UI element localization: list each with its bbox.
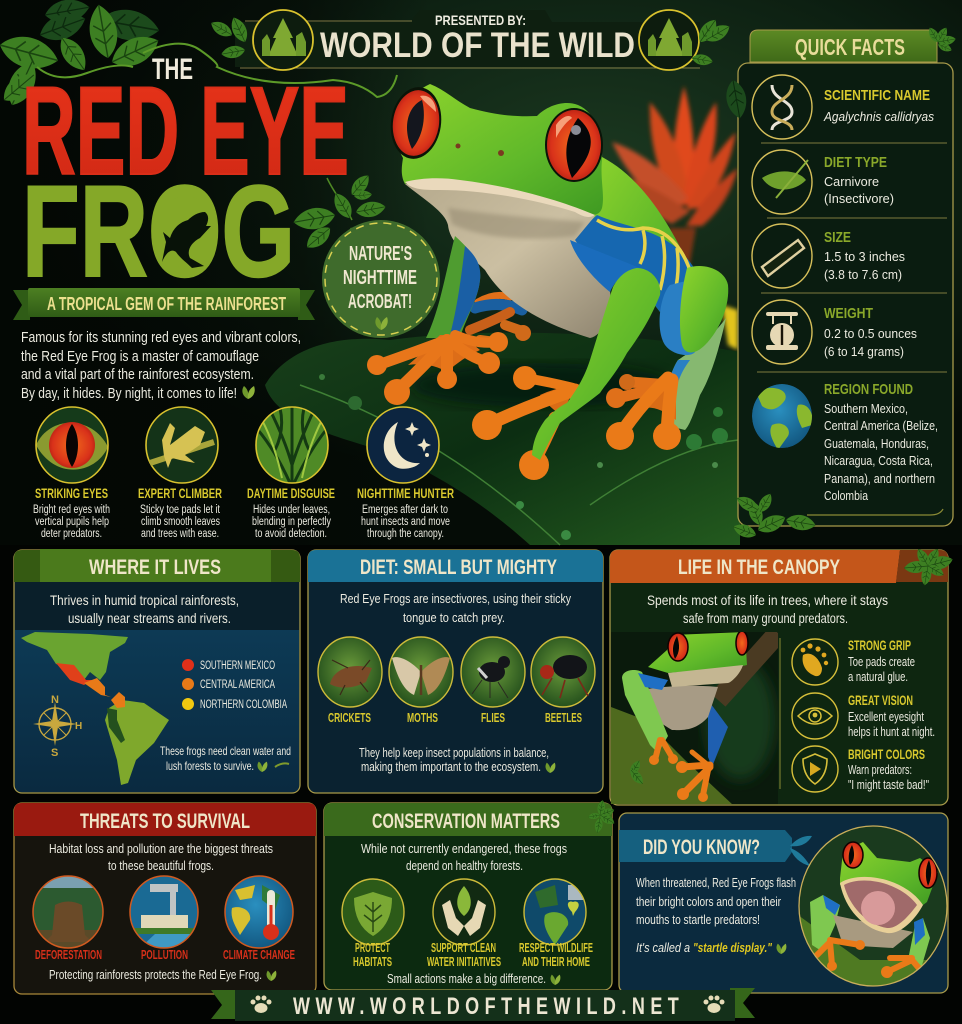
panel: did you know (619, 813, 948, 993)
insect: beetles: BEETLES (545, 711, 582, 725)
panel: conservation matters: depend on healthy forests. (406, 859, 523, 873)
icon: compass: H (75, 721, 82, 732)
fact: diet type: (Insectivore) (824, 191, 894, 206)
did you know heading: DID YOU KNOW? (643, 836, 760, 859)
intro paragraph (21, 329, 301, 402)
trait: bright colors (792, 746, 929, 792)
feature: expert climber: climb smooth leaves (141, 516, 220, 528)
fact: size: SIZE (824, 229, 851, 246)
title (22, 53, 349, 304)
action: protect habitats: PROTECT (355, 941, 390, 955)
panel: threats to survival: to these beautiful frogs. (108, 859, 214, 873)
feature: expert climber: EXPERT CLIMBER (138, 485, 222, 501)
trait: great vision: Excellent eyesight (848, 710, 924, 724)
fact: region found: Southern Mexico, (824, 401, 908, 416)
header banner: presented by (235, 10, 700, 68)
feature: daytime disguise: to avoid detection. (255, 528, 327, 540)
fact: scientific name: Agalychnis callidryas (823, 109, 934, 124)
insect: flies: FLIES (481, 711, 505, 725)
trait: strong grip: Toe pads create (848, 655, 915, 669)
right eye (545, 108, 603, 182)
rear far toes (470, 295, 670, 398)
action: support clean water: WATER INITIATIVES (427, 955, 501, 969)
flower: yellow bloom at right (722, 305, 738, 350)
logo right: forest emblem (639, 10, 733, 70)
threat: pollution: POLLUTION (141, 947, 188, 962)
action: respect wildlife: RESPECT WILDLIFE (519, 941, 593, 955)
threat: pollution (130, 876, 198, 962)
badge: nature's nighttime acrobat: ACROBAT! (348, 291, 412, 313)
left arm (426, 236, 480, 338)
rear foot (642, 375, 676, 420)
map legend: NORTHERN COLOMBIA (200, 699, 287, 711)
ribbon: tagline (13, 288, 315, 320)
title: THE (152, 53, 193, 86)
panel: where it lives: lush forests to survive. (166, 759, 254, 773)
fact: diet type: Carnivore (824, 174, 879, 189)
fact: weight (752, 300, 917, 364)
intro paragraph: Famous for its stunning red eyes and vibrant colors, (21, 329, 301, 346)
feature: striking eyes (33, 407, 110, 540)
panel: quick facts (738, 30, 953, 526)
where it lives heading: WHERE IT LIVES (89, 556, 221, 579)
panel: did you know: mouths to startle predators! (636, 912, 760, 927)
icon: climbing frog (146, 407, 218, 483)
map legend: SOUTHERN MEXICO (200, 660, 275, 672)
insect: moths (389, 637, 453, 725)
icon: ruler (752, 224, 812, 288)
panel: life in the canopy: safe from many ground predators. (683, 610, 848, 626)
panel: conservation matters: While not currently endangered, these frogs (361, 842, 567, 856)
fact: weight: WEIGHT (824, 305, 873, 322)
panel: conservation matters (324, 803, 612, 990)
panel: life in the canopy: Spends most of its life in trees, where it stays (647, 592, 888, 608)
startled frog photo (798, 826, 948, 986)
feature: striking eyes: deter predators. (41, 528, 102, 540)
icon: red eye (36, 407, 108, 483)
brand name: WORLD OF THE WILD (320, 26, 635, 65)
main frog leaf (265, 333, 740, 545)
trait: bright colors: Warn predators: (848, 763, 912, 777)
front foot (540, 385, 575, 416)
panel: diet: making them important to the ecosystem. (361, 760, 541, 774)
action: protect habitats: HABITATS (353, 955, 392, 969)
fact: scientific name (752, 75, 934, 139)
website url: WWW.WORLDOFTHEWILD.NET (293, 994, 684, 1020)
fact: diet type: DIET TYPE (824, 154, 887, 171)
leaves: canopy corner (904, 547, 954, 586)
icon: scale (752, 300, 812, 364)
left eye (386, 84, 446, 162)
belly (405, 178, 610, 338)
solid O fill behind silhouette (156, 196, 216, 268)
feature: expert climber (138, 407, 222, 540)
footer ribbon: website (211, 988, 755, 1021)
icon: compass: N (51, 694, 59, 706)
panel: did you know: It's called a (636, 940, 690, 955)
fact: diet type (752, 150, 894, 214)
conservation heading: CONSERVATION MATTERS (372, 810, 560, 833)
fact: region found: REGION FOUND (824, 381, 913, 398)
map legend: CENTRAL AMERICA (200, 679, 275, 691)
fact: region found: Colombia (824, 488, 869, 503)
feature: nighttime hunter: hunt insects and move (361, 516, 450, 528)
logo left: forest emblem (208, 10, 313, 70)
leaves: top left cluster (0, 0, 164, 110)
feature: nighttime hunter: Emerges after dark to (362, 504, 448, 516)
panel: did you know: When threatened, Red Eye Frogs flash (636, 875, 796, 890)
panel: where it lives: These frogs need clean water and (160, 744, 291, 758)
panel: diet: Red Eye Frogs are insectivores, using their sticky (340, 591, 571, 606)
fact: region found: Nicaragua, Costa Rica, (824, 453, 933, 468)
panel: rainforest hero background (0, 0, 962, 545)
panel: did you know: "startle display." (693, 940, 773, 955)
action: support clean water: SUPPORT CLEAN (431, 941, 496, 955)
fact: region found: Panama), and northern (824, 471, 935, 486)
icon: moon and stars (367, 407, 439, 483)
feature: daytime disguise: Hides under leaves, (253, 504, 330, 516)
trait: great vision: helps it hunt at night. (848, 725, 935, 739)
insect: flies (461, 637, 525, 725)
feature: nighttime hunter: NIGHTTIME HUNTER (357, 485, 454, 501)
title: RED EYE (22, 62, 349, 201)
threat: climate change (223, 876, 295, 962)
action: protect habitats (342, 879, 404, 969)
icon: paw left (250, 996, 272, 1013)
panel: threats to survival: Habitat loss and pollution are the biggest threats (49, 842, 273, 856)
map of the Americas (21, 632, 169, 785)
insect: crickets: CRICKETS (328, 711, 371, 725)
action: support clean water (427, 879, 501, 969)
icon: globe (752, 384, 813, 450)
fact: region found (752, 381, 938, 503)
fact: size: 1.5 to 3 inches (824, 249, 905, 264)
presented by text: PRESENTED BY: (435, 12, 526, 28)
feature: striking eyes: STRIKING EYES (35, 485, 108, 501)
icon: paw right (704, 996, 724, 1013)
insect: beetles (531, 637, 595, 725)
icon: leaf camouflage (256, 407, 328, 483)
quick facts heading: QUICK FACTS (795, 34, 905, 60)
feature: nighttime hunter (357, 407, 454, 540)
feature: striking eyes: vertical pupils help (35, 516, 109, 528)
trait: great vision (792, 692, 935, 739)
icon: compass (33, 694, 82, 759)
threat: climate change: CLIMATE CHANGE (223, 947, 295, 962)
panel: where it lives: Thrives in humid tropical rainforests, (50, 592, 239, 608)
action: respect wildlife (519, 879, 593, 969)
trait: strong grip: a natural glue. (848, 670, 908, 684)
feature: daytime disguise (247, 407, 335, 540)
fact: region found: Central America (Belize, (824, 418, 938, 433)
fact: weight: (6 to 14 grams) (824, 344, 904, 359)
insect: crickets (318, 637, 382, 725)
leaves: quick facts corners (723, 26, 957, 541)
threat: deforestation: DEFORESTATION (35, 947, 102, 962)
map legend (182, 659, 287, 711)
action: respect wildlife: AND THEIR HOME (522, 955, 590, 969)
vines (37, 44, 397, 97)
panel: where it lives: usually near streams and rivers. (68, 610, 231, 626)
feature: striking eyes: Bright red eyes with (33, 504, 110, 516)
ribbon: tagline: A TROPICAL GEM OF THE RAINFOREST (47, 294, 286, 314)
icon: DNA helix (752, 75, 812, 139)
fact: region found: Guatemala, Honduras, (824, 436, 929, 451)
fact: scientific name: SCIENTIFIC NAME (824, 87, 930, 104)
flower: red bromeliad (606, 86, 738, 285)
panel: diet: tongue to catch prey. (403, 610, 505, 625)
icon: cricket on leaf (752, 150, 812, 214)
canopy heading: LIFE IN THE CANOPY (678, 556, 840, 579)
intro paragraph: By day, it hides. By night, it comes to life! (21, 385, 237, 402)
left foot (408, 335, 480, 372)
intro paragraph: and a vital part of the rainforest ecosystem. (21, 366, 254, 383)
badge: nature's nighttime acrobat: NATURE'S (349, 243, 412, 265)
trait: great vision: GREAT VISION (848, 692, 913, 708)
panel: threats to survival (14, 803, 316, 994)
threat: deforestation (33, 876, 103, 962)
panel: conservation matters: Small actions make a big difference. (387, 972, 546, 986)
feature: daytime disguise: DAYTIME DISGUISE (247, 485, 335, 501)
leaves: conservation corner (588, 800, 616, 833)
panel: threats to survival: Protecting rainforests protects the Red Eye Frog. (49, 968, 262, 982)
panel: diet (308, 550, 603, 793)
canopy frog photo (611, 631, 778, 805)
trait: bright colors: "I might taste bad!" (848, 778, 929, 792)
feature: expert climber: and trees with ease. (141, 528, 219, 540)
trait: strong grip (792, 637, 915, 685)
hero frog (367, 84, 728, 480)
trait: bright colors: BRIGHT COLORS (848, 746, 925, 762)
icon: frog silhouette in O (162, 212, 211, 268)
badge: nature's nighttime acrobat (322, 220, 440, 338)
front forearm (570, 240, 640, 292)
fact: size (752, 224, 905, 288)
panel: where it lives (14, 549, 300, 793)
insect: moths: MOTHS (407, 711, 438, 725)
badge: nature's nighttime acrobat: NIGHTTIME (343, 267, 417, 289)
leaves: around badge (292, 171, 387, 253)
diet heading: DIET: SMALL BUT MIGHTY (360, 556, 557, 579)
feature: nighttime hunter: through the canopy. (367, 528, 444, 540)
body back (590, 155, 692, 312)
intro paragraph: the Red Eye Frog is a master of camouflage (21, 348, 259, 365)
fact: size: (3.8 to 7.6 cm) (824, 267, 902, 282)
panel: life in the canopy (610, 550, 948, 805)
rear leg (665, 318, 726, 430)
fact: weight: 0.2 to 0.5 ounces (824, 326, 917, 341)
trait: strong grip: STRONG GRIP (848, 637, 911, 653)
head (397, 84, 603, 215)
threats heading: THREATS TO SURVIVAL (80, 810, 250, 833)
feature: daytime disguise: blending in perfectly (252, 516, 331, 528)
icon: compass: S (51, 747, 58, 759)
feature: expert climber: Sticky toe pads let it (140, 504, 221, 516)
panel: diet: They help keep insect populations in balance, (359, 746, 549, 760)
title: FROG (22, 158, 295, 304)
panel: did you know: their bright colors and open their (636, 894, 782, 909)
